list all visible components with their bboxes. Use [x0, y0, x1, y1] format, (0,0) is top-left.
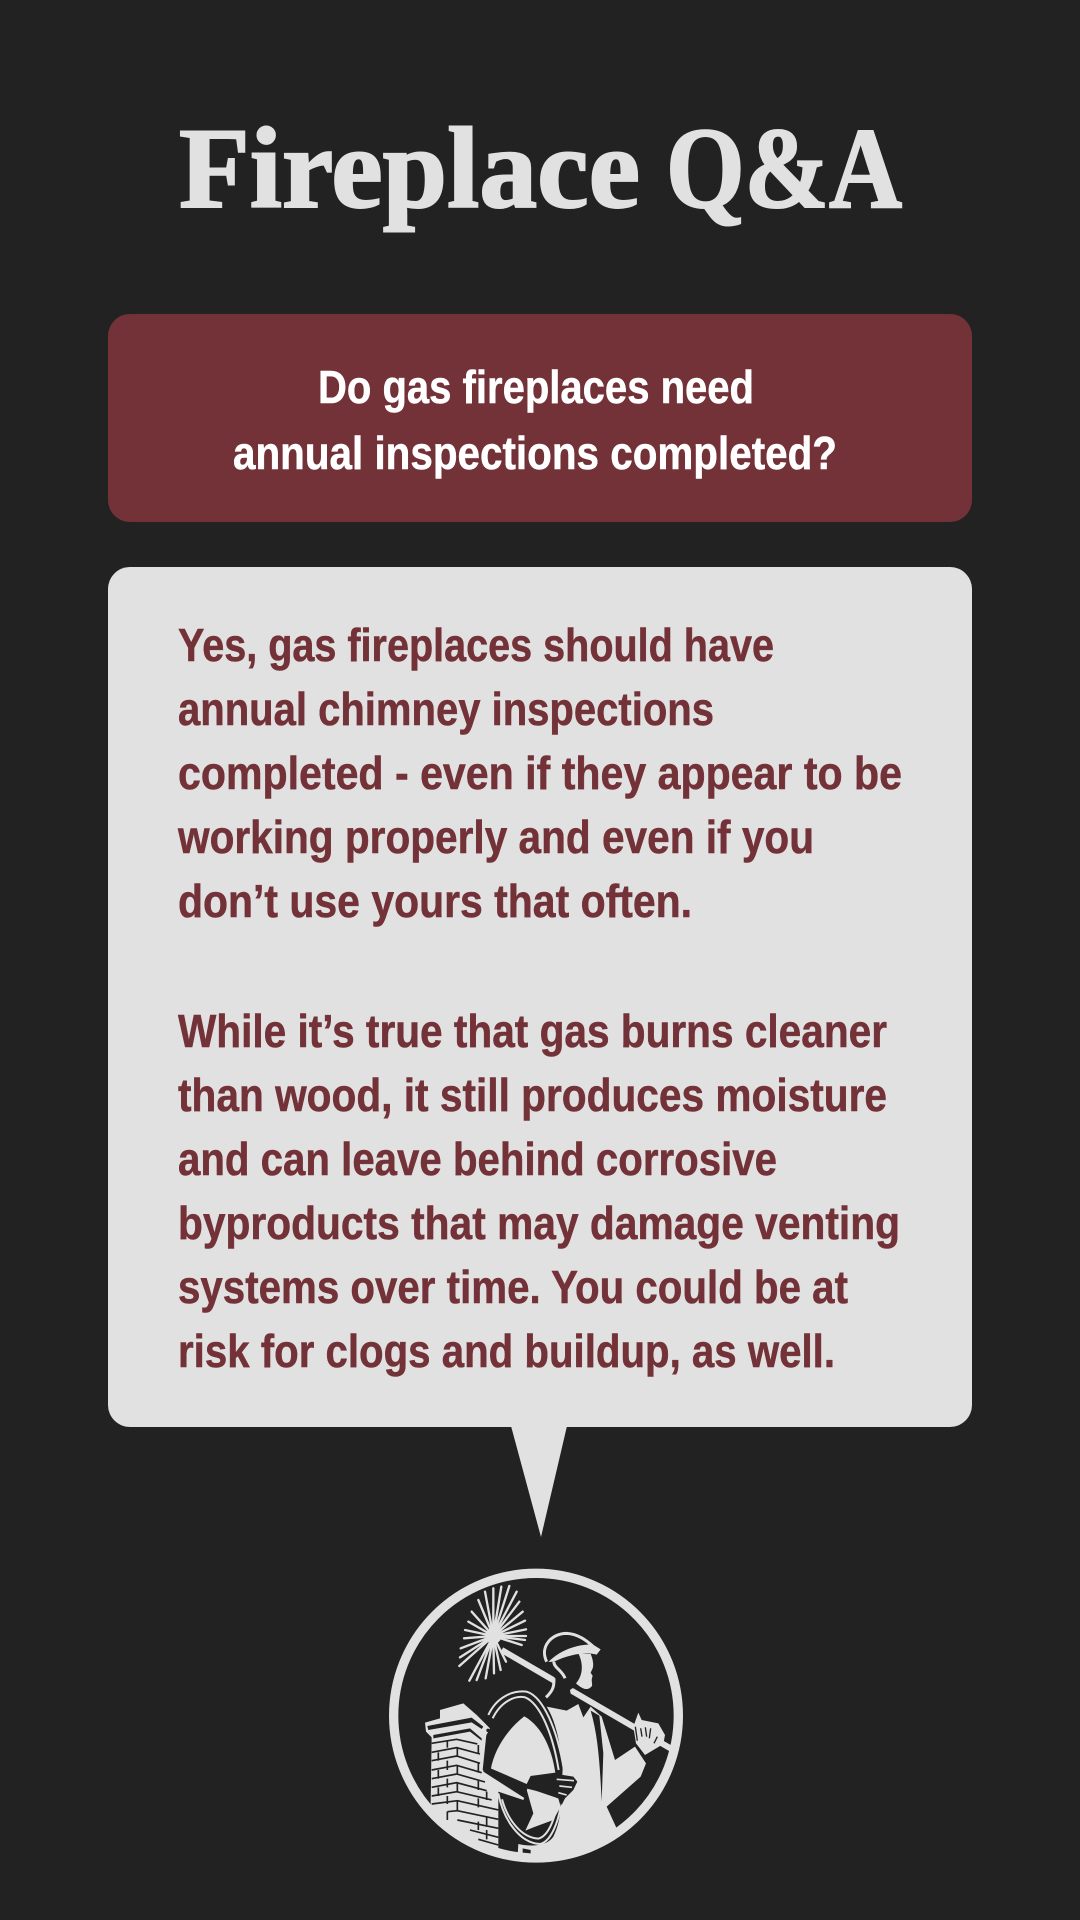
head dark mask — [554, 1677, 573, 1694]
coil lines — [488, 1691, 564, 1844]
trouser gap — [523, 1848, 531, 1853]
answer paragraph 1: Yes, gas fireplaces should have — [178, 619, 774, 671]
brush — [459, 1586, 526, 1681]
panel: question: Do gas fireplaces need — [318, 361, 754, 413]
strap shadow — [591, 1711, 603, 1802]
answer paragraph 1: don’t use yours that often. — [178, 875, 692, 927]
answer paragraph 1: annual chimney inspections — [178, 683, 714, 735]
answer paragraph 1: working properly and even if you — [177, 811, 814, 863]
pole — [502, 1650, 673, 1750]
answer paragraph 2: While it’s true that gas burns cleaner — [178, 1005, 887, 1057]
face profile — [576, 1653, 593, 1689]
raised hand — [633, 1713, 665, 1755]
answer paragraph 2: risk for clogs and buildup, as well. — [178, 1325, 835, 1377]
forearm — [525, 1787, 561, 1831]
answer paragraph 1: completed - even if they appear to be — [178, 747, 902, 799]
title: Fireplace — [179, 105, 640, 232]
chimney — [425, 1703, 525, 1850]
icon: chimney sweep logo — [394, 1573, 678, 1870]
title: Q&A — [666, 105, 902, 232]
answer paragraph 2 — [178, 1005, 900, 1377]
answer paragraph 2: systems over time. You could be at — [178, 1261, 848, 1313]
coil inner panel — [491, 1715, 555, 1784]
torso — [518, 1704, 646, 1854]
panel: question — [108, 314, 972, 522]
glove — [526, 1774, 577, 1805]
answer paragraph 2: than wood, it still produces moisture — [178, 1069, 887, 1121]
neck and ear outline — [546, 1662, 565, 1697]
panel: answer speech bubble — [108, 567, 972, 1537]
hat — [544, 1633, 593, 1662]
answer paragraph 2: and can leave behind corrosive — [178, 1133, 777, 1185]
answer paragraph 1 — [177, 619, 902, 927]
answer paragraph 2: byproducts that may damage venting — [178, 1197, 900, 1249]
panel: question: annual inspections completed? — [233, 427, 837, 479]
